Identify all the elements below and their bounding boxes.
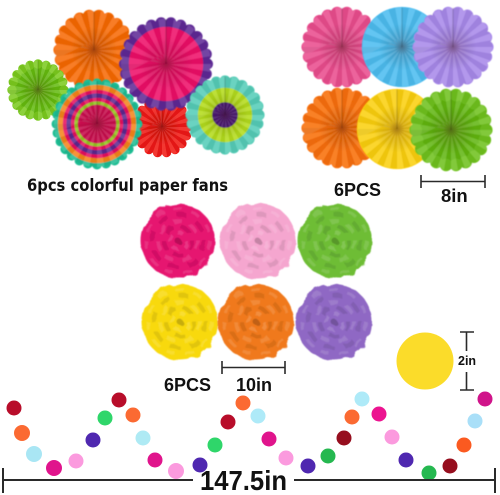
fan: magenta and purple (121, 19, 211, 109)
pompom: green (298, 204, 372, 278)
pompom: purple (296, 284, 372, 360)
pompom: light pink (220, 203, 296, 279)
pompom: hot pink (141, 204, 215, 278)
fan: yellow (357, 89, 437, 169)
label: 6PCS pompoms: 6PCS (164, 375, 211, 395)
pompom: yellow (142, 284, 218, 360)
label: 6PCS fans: 6PCS (334, 180, 381, 200)
dimension: 8in: 8in (441, 185, 468, 206)
fan: lavender (414, 8, 492, 86)
fan: red (132, 97, 192, 157)
garland of colored dots (6, 392, 492, 480)
fan: green (411, 90, 491, 170)
fan: rainbow rings (54, 81, 140, 167)
dimension: 10in (222, 361, 285, 395)
fan: teal and lime (187, 77, 263, 153)
dimension: 147.5in (3, 465, 495, 495)
dimension: 2in: 2in (458, 354, 476, 368)
fan: orange small (303, 89, 381, 167)
pompom: orange (218, 284, 294, 360)
fan: pink (303, 8, 381, 86)
dimension: 8in (421, 175, 485, 206)
fan: sky blue (362, 7, 442, 87)
caption: paper fans: 6pcs colorful paper fans (27, 176, 228, 196)
fan: lime green (8, 60, 68, 120)
fan: orange (55, 11, 133, 89)
dimension: 2in (458, 332, 476, 390)
yellow paper circle (396, 332, 454, 390)
dimension: 10in: 10in (236, 375, 272, 395)
